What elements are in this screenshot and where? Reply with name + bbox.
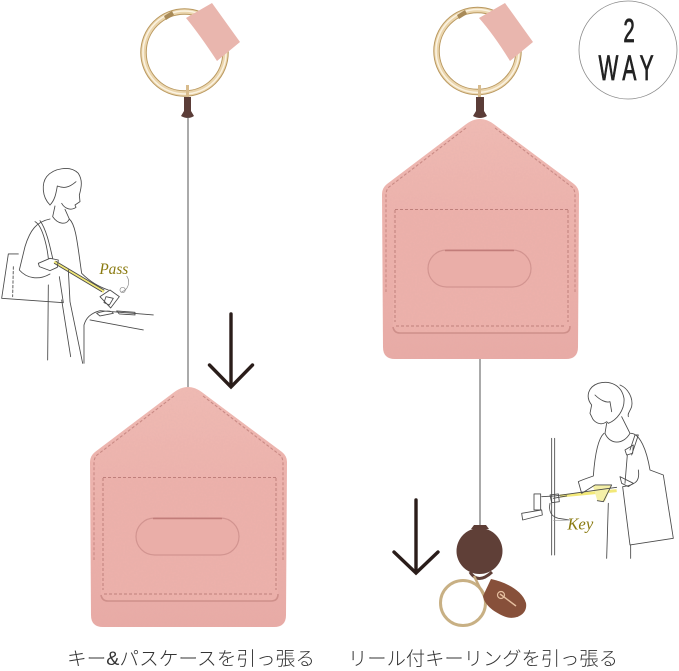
illustration: woman tapping pass: Pass	[98, 261, 128, 278]
left down arrow	[210, 314, 252, 387]
right down arrow	[394, 500, 438, 573]
reel key ring with brown fob	[440, 525, 526, 626]
right reel cord	[479, 359, 481, 525]
left ring with pink band	[143, 3, 240, 118]
caption: right: リール付キーリングを引っ張る	[348, 648, 618, 670]
illustration: woman unlocking door	[522, 382, 673, 558]
caption: left: キー&パスケースを引っ張る	[67, 648, 315, 670]
illustration: woman tapping pass	[2, 169, 153, 363]
right ring with pink band	[436, 3, 533, 118]
2 WAY badge: 2	[623, 12, 635, 49]
2 WAY badge: WAY	[599, 50, 658, 88]
left reel cord	[187, 117, 189, 388]
right pink pass case	[382, 119, 579, 359]
2 WAY badge	[579, 1, 677, 99]
left pink pass case	[90, 387, 287, 627]
illustration: woman unlocking door: Key	[566, 514, 594, 533]
